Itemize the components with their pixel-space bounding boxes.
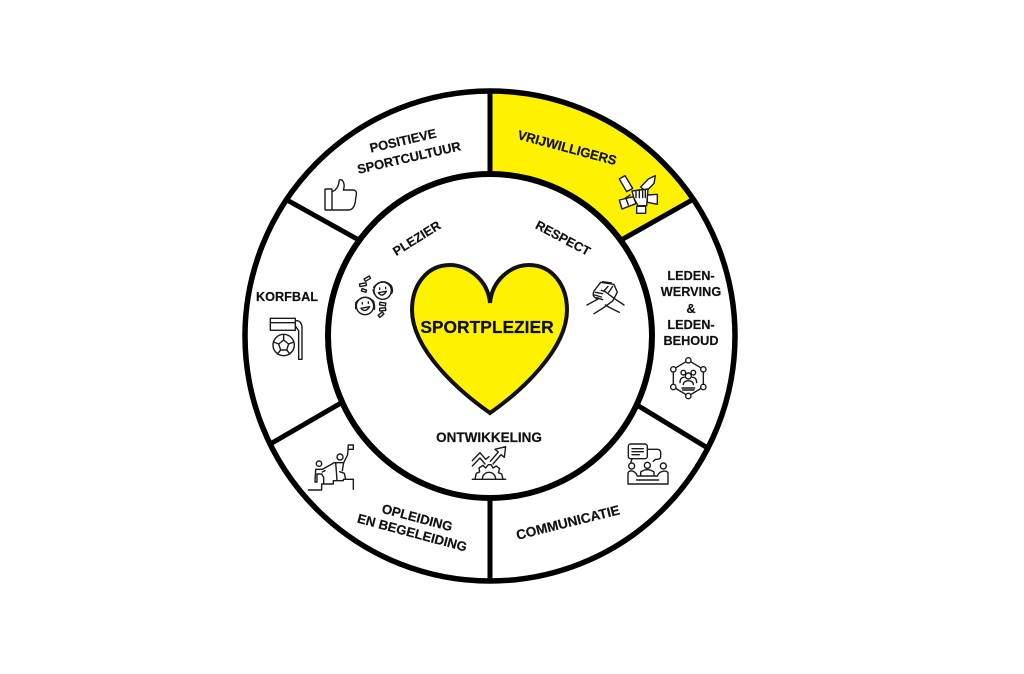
- label: ledenwerving en ledenbehoud: &: [686, 302, 696, 316]
- label: respect: RESPECT: [533, 218, 593, 259]
- icon: volunteer hands: [619, 176, 657, 213]
- label: opleiding en begeleiding: EN BEGELEIDING: [356, 511, 469, 555]
- label: ledenwerving en ledenbehoud: LEDEN-: [667, 269, 715, 283]
- heart title: SPORTPLEZIER: [420, 317, 554, 337]
- icon: clasped hands: [587, 282, 624, 314]
- label: ontwikkeling: ONTWIKKELING: [436, 430, 542, 445]
- segment dividers: [272, 91, 706, 581]
- icon: laughing faces: [356, 276, 393, 317]
- label: opleiding en begeleiding: OPLEIDING: [380, 501, 454, 534]
- icon: people in discussion: [628, 444, 668, 484]
- icon: gear and growth arrow: [472, 447, 506, 479]
- label: vrijwilligers: VRIJWILLIGERS: [516, 127, 619, 168]
- label: korfbal: KORFBAL: [256, 290, 318, 304]
- label: positieve sportcultuur: SPORTCULTUUR: [356, 138, 463, 177]
- label: positieve sportcultuur: POSITIEVE: [368, 126, 438, 156]
- inner ring: [328, 174, 652, 498]
- label: ledenwerving en ledenbehoud: BEHOUD: [664, 334, 718, 348]
- label: ledenwerving en ledenbehoud: LEDEN-: [667, 318, 715, 332]
- label: ledenwerving en ledenbehoud: [661, 269, 721, 348]
- label: plezier: PLEZIER: [390, 218, 443, 259]
- heart: [412, 265, 567, 413]
- icon: thumbs up: [325, 180, 356, 210]
- icon: football and goal: [270, 318, 302, 359]
- icon: climbing steps with flag: [308, 445, 353, 490]
- label: ledenwerving en ledenbehoud: WERVING: [661, 285, 721, 299]
- label: communicatie: COMMUNICATIE: [515, 503, 621, 543]
- icon: network of people: [671, 358, 706, 399]
- highlighted segment: vrijwilligers: [490, 91, 692, 239]
- outer ring: [245, 91, 735, 581]
